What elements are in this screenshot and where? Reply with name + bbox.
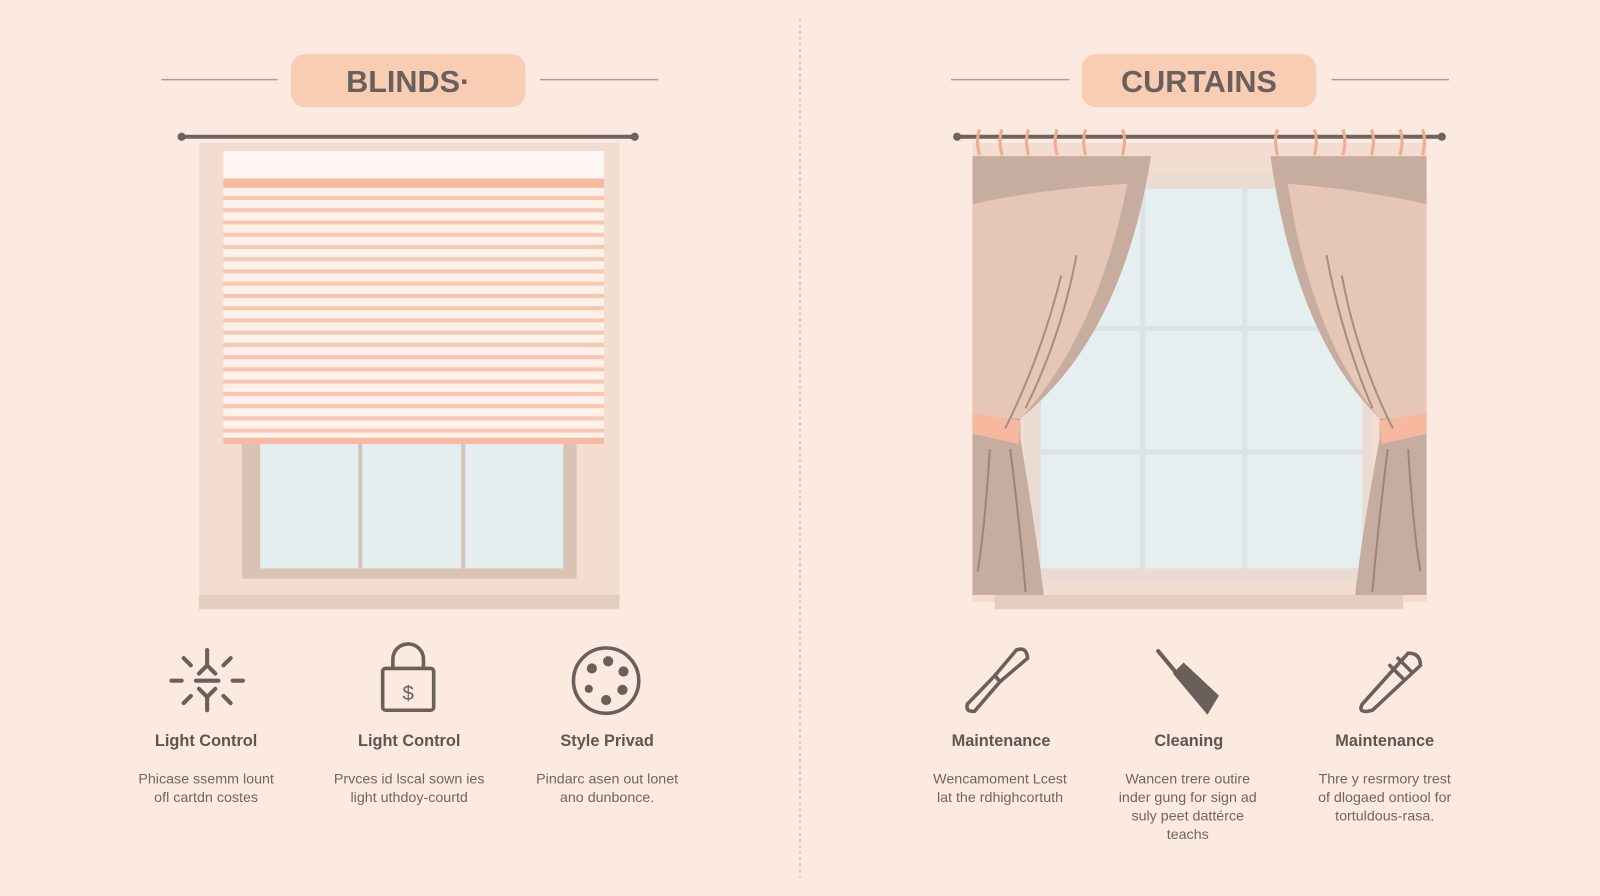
title: curtains: CURTAINS [1121, 65, 1277, 99]
feature descriptions: lat the rdhighcortuth [937, 790, 1063, 806]
icon: cleaning [1158, 651, 1216, 711]
feature descriptions: Wancen trere outire [1125, 772, 1250, 788]
feature descriptions: tortuldous-rasa. [1335, 808, 1434, 824]
icon: padlock [383, 644, 434, 710]
feature labels: Light Control [155, 732, 257, 750]
feature descriptions [138, 772, 1452, 843]
left curtain [972, 156, 1151, 595]
feature labels [155, 732, 1434, 750]
right curtain [1270, 156, 1427, 595]
feature descriptions: Phicase ssemm lount [138, 772, 274, 788]
feature descriptions: Thre y resrmory trest [1319, 772, 1451, 788]
feature descriptions: Prvces id lscal sown ies [334, 772, 485, 788]
title: blinds [161, 54, 658, 107]
icon: tool 1 [967, 649, 1028, 711]
icon: palette [573, 648, 639, 713]
feature descriptions: ano dunbonce. [560, 790, 654, 806]
title: curtains [951, 54, 1449, 107]
feature descriptions: suly peet dattérce [1131, 808, 1244, 824]
feature labels: Maintenance [1335, 732, 1434, 750]
feature descriptions: Wencamoment Lcest [933, 772, 1067, 788]
feature descriptions: Pindarc asen out lonet [536, 772, 678, 788]
feature descriptions: of dlogaed ontiool for [1318, 790, 1452, 806]
icon: light control burst [171, 650, 243, 710]
icon: padlock: $ [402, 683, 414, 705]
feature labels: Cleaning [1154, 732, 1223, 750]
illustration: blinds window [178, 133, 639, 609]
icon: tool 2 [1361, 653, 1420, 711]
feature descriptions: ofl cartdn costes [154, 790, 258, 806]
feature descriptions: teachs [1167, 827, 1209, 843]
title: blinds: BLINDS· [346, 65, 470, 99]
feature labels: Light Control [358, 732, 460, 750]
feature descriptions: light uthdoy-courtd [350, 790, 468, 806]
feature labels: Style Privad [560, 732, 654, 750]
feature labels: Maintenance [952, 732, 1050, 750]
feature descriptions: inder gung for sign ad [1119, 790, 1257, 806]
illustration: curtains window [953, 130, 1446, 609]
